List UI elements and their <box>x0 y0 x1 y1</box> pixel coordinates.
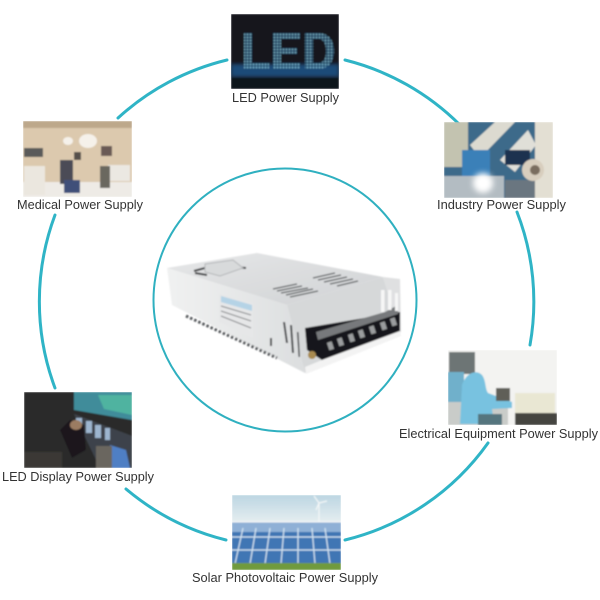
image: clean-room workers <box>448 350 557 425</box>
image: LED sign <box>231 14 339 89</box>
terminal block <box>305 312 400 360</box>
image: operating room <box>23 121 132 197</box>
label: Medical Power Supply <box>17 198 144 212</box>
image: robot arm welding <box>444 122 553 198</box>
item: LED Display Power Supply <box>2 392 155 484</box>
label: Solar Photovoltaic Power Supply <box>192 571 379 585</box>
end face <box>287 277 401 373</box>
item: Solar Photovoltaic Power Supply <box>192 495 379 585</box>
end slots <box>381 290 398 312</box>
label: Electrical Equipment Power Supply <box>399 427 599 441</box>
side vents <box>186 316 277 358</box>
screw <box>308 351 316 359</box>
item: Electrical Equipment Power Supply <box>399 350 599 441</box>
label on side <box>219 294 253 338</box>
item: LED Power Supply <box>231 14 340 105</box>
product: power supply unit <box>167 253 401 374</box>
top vents <box>273 273 358 297</box>
top face <box>167 253 383 305</box>
long side face <box>167 268 305 373</box>
label: LED Display Power Supply <box>2 470 155 484</box>
outer ring arcs <box>39 60 534 540</box>
top fan grille <box>194 267 246 275</box>
label: Industry Power Supply <box>437 198 567 212</box>
item: Industry Power Supply <box>437 122 567 212</box>
label: LED Power Supply <box>232 91 340 105</box>
item: Medical Power Supply <box>17 121 144 212</box>
inner circle <box>154 168 416 432</box>
image: solar farm <box>232 495 341 570</box>
image: control room <box>24 392 132 468</box>
wind turbine <box>314 496 327 522</box>
